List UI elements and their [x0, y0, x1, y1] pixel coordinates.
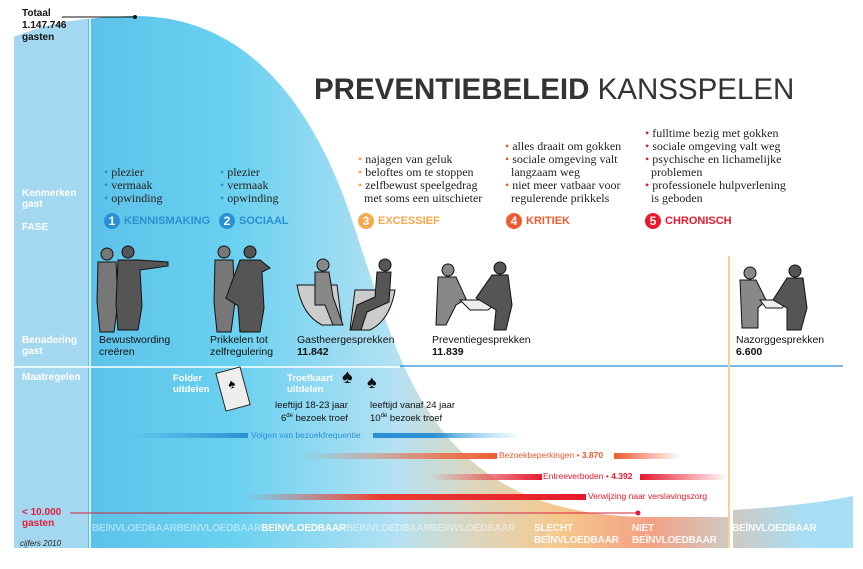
text: Prikkelen tot	[210, 334, 268, 346]
text: leeftijd vanaf 24 jaar	[370, 400, 455, 411]
measure: folder: Folder	[173, 373, 202, 384]
characteristics phase 5: • psychische en lichamelijke	[645, 152, 782, 166]
characteristics phase 4: • sociale omgeving valt	[505, 152, 618, 166]
measure: troefkaart	[287, 373, 333, 395]
text: SLECHT	[534, 523, 573, 534]
text: Entreeverboden • 4.392	[543, 471, 632, 481]
text: BEÏNVLOEDBAAR	[534, 535, 619, 546]
characteristics phase 2: • plezier	[220, 165, 260, 179]
row labels: gast	[22, 199, 43, 210]
total label	[22, 8, 66, 43]
characteristics phase 4: • alles draait om gokken	[505, 139, 621, 153]
icon: aftercare men	[740, 265, 807, 330]
measure: folder	[173, 373, 209, 395]
approach captions: creëren	[99, 346, 135, 358]
characteristics phase 5: problemen	[651, 165, 702, 179]
phase 2	[219, 213, 288, 229]
text: zelfregulering	[210, 346, 273, 358]
text: 6de bezoek troef	[281, 413, 348, 424]
phase 5	[645, 213, 732, 229]
icon: folder: ♠	[226, 376, 237, 392]
text: ♠	[367, 372, 377, 392]
characteristics phase 1: • opwinding	[104, 191, 163, 205]
icon: men at table	[436, 262, 512, 330]
phase 4	[506, 213, 570, 229]
row labels	[22, 188, 76, 210]
phase 3	[358, 213, 440, 229]
text: Maatregelen	[22, 372, 80, 383]
characteristics phase 5: • sociale omgeving valt weg	[645, 139, 780, 153]
text: 11.842	[297, 346, 329, 358]
approach captions: Bewustwording	[99, 334, 170, 346]
text: 10de bezoek troef	[370, 413, 442, 424]
total label: 1.147.746	[22, 20, 66, 31]
characteristics phase 2	[220, 165, 279, 205]
text: leeftijd 18-23 jaar	[275, 400, 348, 411]
row labels: Kenmerken	[22, 188, 76, 199]
total label: Totaal	[22, 8, 51, 19]
phase 2: SOCIAAL	[239, 215, 288, 227]
measure: troefkaart: Troefkaart	[287, 373, 333, 384]
characteristics phase 1: • plezier	[104, 165, 144, 179]
phase 1: KENNISMAKING	[124, 215, 210, 227]
text: Bezoekbeperkingen • 3.870	[499, 450, 603, 460]
measure: folder: uitdelen	[173, 384, 209, 395]
phase 3: 3	[363, 214, 369, 228]
characteristics phase 1: • vermaak	[104, 178, 153, 192]
phase 2: 2	[224, 214, 230, 228]
icon: folder	[215, 366, 251, 412]
characteristics phase 3: • zelfbewust speelgedrag	[358, 178, 478, 192]
text: FASE	[22, 222, 48, 233]
approach captions	[99, 334, 170, 358]
text: Nazorggesprekken	[736, 334, 824, 346]
phase 4: KRITIEK	[526, 215, 570, 227]
phase 5: 5	[650, 214, 656, 228]
text: Gastheergesprekken	[297, 334, 394, 346]
characteristics phase 4: langzaam weg	[511, 165, 580, 179]
text: BEÏNVLOEDBAAR	[732, 523, 817, 534]
text: Benadering	[22, 335, 77, 346]
text: cijfers 2010	[20, 539, 61, 548]
icon: two men talking	[214, 246, 270, 332]
less than 10000 label: < 10.000	[22, 507, 61, 518]
text: 6.600	[736, 346, 762, 358]
characteristics phase 3: • najagen van geluk	[358, 152, 453, 166]
characteristics phase 2: • opwinding	[220, 191, 279, 205]
text: Verwijzing naar verslavingszorg	[588, 491, 707, 501]
phase 3: EXCESSIEF	[378, 215, 440, 227]
phase 4: 4	[511, 214, 517, 228]
icon: men in chairs	[297, 259, 395, 330]
less than 10000 label	[22, 507, 61, 529]
text: Preventiegesprekken	[432, 334, 531, 346]
characteristics phase 3: met soms een uitschieter	[364, 191, 482, 205]
characteristics phase 4: • niet meer vatbaar voor	[505, 178, 620, 192]
bar labels: Volgen van bezoekfrequentie	[251, 430, 361, 440]
text: 11.839	[432, 346, 464, 358]
phase 5: CHRONISCH	[665, 215, 732, 227]
characteristics phase 4: regulerende prikkels	[511, 191, 609, 205]
text: BEÏNVLOEDBAAR	[632, 535, 717, 546]
characteristics phase 4	[505, 139, 621, 205]
characteristics phase 1	[104, 165, 163, 205]
icon: spades: ♠	[342, 366, 353, 388]
phase 1	[104, 213, 210, 229]
characteristics phase 5: • professionele hulpverlening	[645, 178, 786, 192]
characteristics phase 3: • beloftes om te stoppen	[358, 165, 474, 179]
icon: two standing men	[97, 246, 168, 332]
less than 10000 label: gasten	[22, 518, 54, 529]
figures	[96, 246, 808, 332]
title: PREVENTIEBELEID KANSSPELEN	[314, 73, 794, 106]
characteristics phase 5	[645, 126, 786, 205]
characteristics phase 3	[358, 152, 482, 205]
phase 1: 1	[109, 214, 115, 228]
characteristics phase 5: is geboden	[651, 191, 703, 205]
text: gast	[22, 346, 43, 357]
characteristics phase 5: • fulltime bezig met gokken	[645, 126, 779, 140]
characteristics phase 2: • vermaak	[220, 178, 269, 192]
influence bands: BEÏNVLOEDBAARBEÏNVLOEDBAARBEÏNVLOEDBAARBEÏNVLOEDBAARBEÏNVLOEDBAAR	[92, 523, 515, 534]
text: NIET	[632, 523, 654, 534]
measure: troefkaart: uitdelen	[287, 384, 323, 395]
total label: gasten	[22, 32, 54, 43]
